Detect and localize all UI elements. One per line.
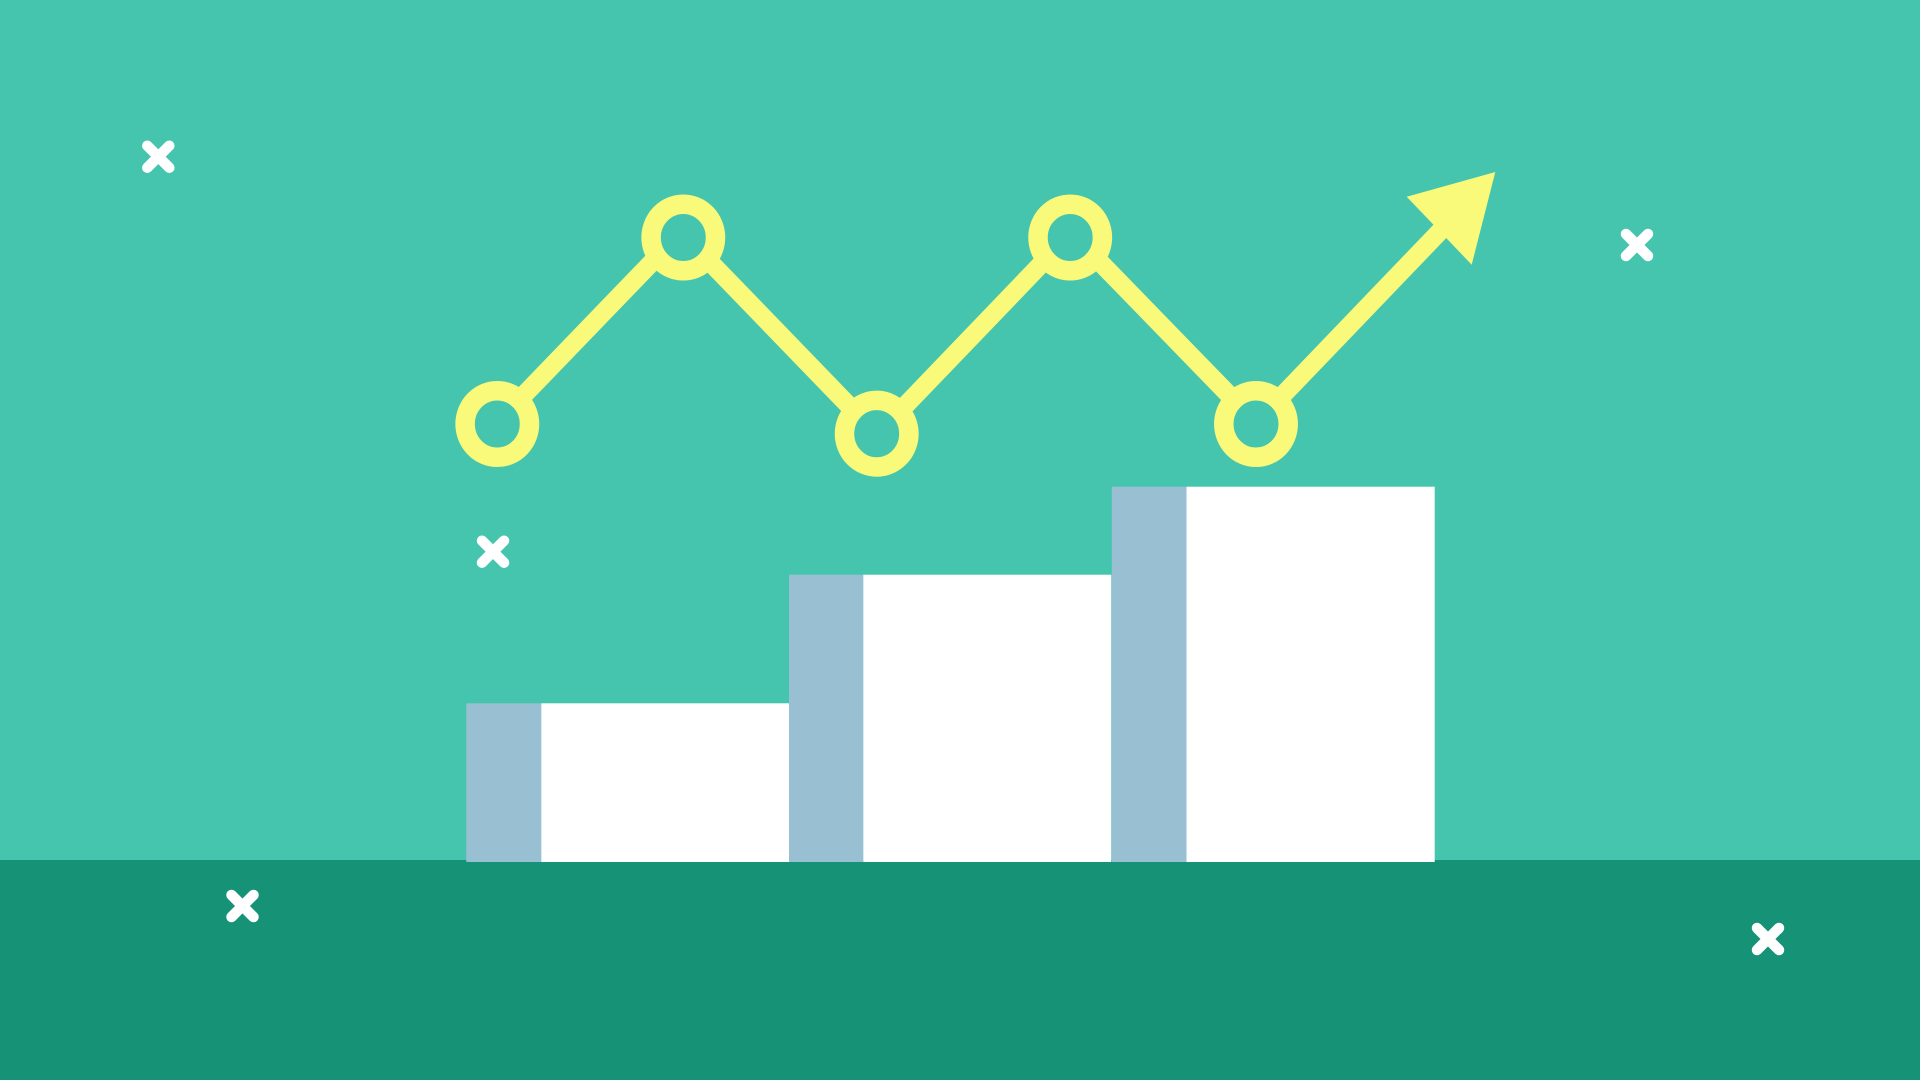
trend line segments	[520, 225, 1446, 412]
icon: white cross top left	[147, 146, 169, 168]
data point 1	[465, 391, 530, 457]
ground band	[0, 860, 1920, 1080]
icon: white cross top right	[1626, 234, 1648, 256]
arrowhead	[1407, 172, 1495, 265]
icon: white cross bottom right	[1757, 928, 1779, 950]
data point 5	[1224, 391, 1288, 457]
line chart: yellow trend with arrow	[465, 172, 1495, 467]
icon: white cross bottom left	[232, 895, 254, 917]
data point 3	[844, 400, 909, 467]
bar 1	[466, 703, 789, 862]
bar 3	[1112, 487, 1435, 862]
icon: white cross middle left	[482, 541, 504, 563]
bar chart: three rising steps	[466, 487, 1435, 862]
data point 4	[1038, 204, 1102, 271]
data point 2	[651, 204, 716, 271]
bar 2	[789, 575, 1111, 862]
